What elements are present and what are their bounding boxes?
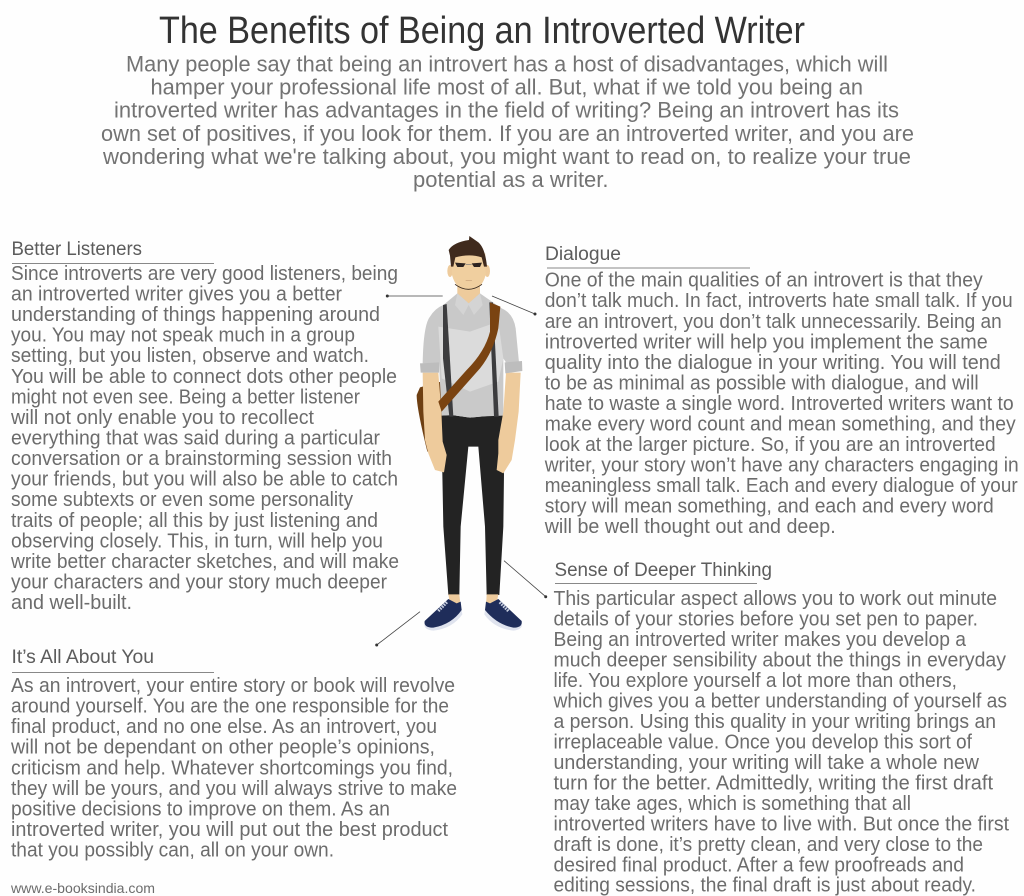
- body text: better listeners: Since introverts are very good listeners, being: [11, 263, 398, 285]
- body text: better listeners: observing closely. This, in turn, will help you: [11, 530, 383, 552]
- body text: sense of deeper thinking: desired final product. After a few proofreads and: [554, 854, 964, 876]
- body text: better listeners: your friends, but you will also be able to catch: [11, 469, 398, 491]
- hair: [449, 236, 487, 267]
- panel: sense of deeper thinking: [553, 560, 1009, 896]
- cross-body strap: [438, 302, 500, 412]
- body text: better listeners: might not even see. Being a better listener: [11, 386, 360, 408]
- body text: better listeners: You will be able to connect dots other people: [11, 366, 397, 388]
- body text: dialogue: are an introvert, you don’t talk unnecessarily. Being an: [545, 311, 1002, 333]
- heading: better listeners: Better Listeners: [12, 239, 142, 260]
- body text: dialogue: to be as minimal as possible with dialogue, and will: [545, 372, 979, 394]
- body text: better listeners: an introverted writer gives you a better: [11, 284, 342, 306]
- body text: sense of deeper thinking: a person. Using this quality in your writing brings an: [554, 711, 996, 733]
- intro text block: introverted writer has advantages in the field of writing? Being an introvert has its: [114, 98, 899, 122]
- glasses and eyes: [455, 263, 482, 267]
- body text: better listeners: you. You may not speak much in a group: [11, 325, 355, 347]
- intro text block: wondering what we're talking about, you might want to read on, to realize your true: [102, 144, 911, 169]
- body text: better listeners: and well-built.: [11, 592, 132, 614]
- heading: dialogue: Dialogue: [545, 244, 621, 265]
- body text: sense of deeper thinking: which gives you a better understanding of yourself as: [553, 690, 1007, 712]
- shirt: [423, 293, 519, 418]
- intro text block: own set of positives, if you look for them. If you are an introverted writer, and you are: [101, 121, 914, 146]
- body text: it's all about you: As an introvert, your entire story or book will revolve: [11, 675, 455, 697]
- intro text block: hamper your professional life most of all. But, what if we told you being an: [150, 74, 863, 100]
- body text: sense of deeper thinking: Being an introverted writer makes you develop a: [554, 629, 967, 651]
- panel: it's all about you: [10, 647, 457, 862]
- intro text block: potential as a writer.: [413, 167, 608, 192]
- body text: it's all about you: final product, and no one else. As an introvert, you: [11, 716, 437, 738]
- body text: sense of deeper thinking: turn for the better. Admittedly, writing the first draft: [554, 772, 993, 794]
- body text: better listeners: will not only enable you to recollect: [10, 407, 314, 429]
- body text: it's all about you: will not be dependant on other people’s opinions,: [10, 737, 435, 759]
- bag: [417, 382, 443, 452]
- title: The Benefits of Being an Introverted Writer: [159, 10, 805, 52]
- body text: dialogue: hate to waste a single word. Introverted writers want to: [545, 393, 1014, 415]
- intro text block: [101, 52, 914, 192]
- shoe soles: [424, 610, 522, 631]
- body text: better listeners: understanding of things happening around: [11, 304, 380, 326]
- body text: it's all about you: around yourself. You are the one responsible for the: [11, 696, 449, 718]
- body text: better listeners: everything that was said during a particular: [11, 428, 380, 450]
- arrow: connector to dialogue: [492, 296, 536, 316]
- body text: sense of deeper thinking: introverted writers have to live with. But once the first: [554, 814, 1009, 836]
- pants: [442, 414, 504, 595]
- body text: dialogue: quality into the dialogue in your writing. You will tend: [545, 352, 1001, 374]
- body text: better listeners: your characters and your story much deeper: [11, 572, 387, 594]
- face: [452, 253, 486, 291]
- panel: better listeners: [10, 239, 399, 614]
- body text: dialogue: make every word count and mean something, and they: [545, 414, 1016, 436]
- body text: sense of deeper thinking: irreplaceable value. Once you develop this sort of: [554, 732, 972, 754]
- body text: sense of deeper thinking: may take ages, which is something that all: [554, 793, 911, 815]
- body text: it's all about you: criticism and help. Whatever shortcomings you find,: [11, 757, 453, 779]
- ears: [447, 265, 490, 277]
- arrow: connector to sense of deeper thinking: [504, 561, 547, 598]
- body text: it's all about you: that you possibly can, all on your own.: [11, 840, 334, 862]
- body text: sense of deeper thinking: much deeper sensibility about the things in everyday: [554, 650, 1006, 672]
- shoe laces: [438, 602, 508, 611]
- body text: sense of deeper thinking: life. You explore yourself a lot more than others,: [554, 670, 957, 692]
- body text: better listeners: traits of people; all this by just listening and: [11, 510, 378, 532]
- body text: it's all about you: positive decisions to improve on them. As an: [11, 798, 390, 820]
- body text: sense of deeper thinking: details of your stories before you set pen to paper.: [554, 608, 978, 630]
- body text: sense of deeper thinking: [553, 588, 1009, 896]
- body text: dialogue: [544, 270, 1019, 538]
- mouth: [466, 280, 472, 282]
- body text: dialogue: One of the main qualities of an introvert is that they: [545, 270, 983, 292]
- rolled sleeve cuffs: [420, 361, 522, 373]
- body text: it's all about you: introverted writer, you will put out the best product: [11, 819, 448, 841]
- website credit: www.e-booksindia.com: [10, 880, 155, 896]
- body text: better listeners: conversation or a brainstorming session with: [11, 448, 392, 470]
- right shoe: [485, 599, 522, 628]
- left shoe: [425, 599, 462, 628]
- body text: dialogue: story will mean something, and each and every word: [545, 496, 994, 518]
- body text: sense of deeper thinking: draft is done, it’s pretty clean, and very close to the: [554, 834, 983, 856]
- body text: it's all about you: they will be yours, and you will always strive to make: [11, 778, 457, 800]
- body text: it's all about you: [10, 675, 457, 862]
- body text: better listeners: setting, but you listen, observe and watch.: [11, 345, 369, 367]
- right arm: [497, 373, 521, 473]
- jaw line: [455, 284, 482, 289]
- body text: dialogue: will be well thought out and deep.: [544, 516, 836, 538]
- body text: dialogue: writer, your story won’t have any characters engaging in: [544, 455, 1019, 477]
- body text: sense of deeper thinking: understanding, your writing will take a whole new: [554, 752, 980, 774]
- body text: dialogue: don’t talk much. In fact, introverts hate small talk. If you: [545, 290, 1013, 312]
- placket and collar: [455, 293, 483, 315]
- left arm: [423, 373, 447, 472]
- shirt highlights: [438, 322, 503, 392]
- body text: dialogue: introverted writer will help you implement the same: [545, 331, 988, 353]
- illustration: introverted writer character: [417, 236, 522, 631]
- suspenders: [443, 302, 499, 417]
- body text: better listeners: [10, 263, 399, 614]
- neck: [457, 282, 480, 305]
- body text: better listeners: write better character sketches, and will make: [10, 551, 399, 573]
- body text: better listeners: some subtexts or even some personality: [11, 489, 353, 511]
- panel: dialogue: [544, 244, 1019, 538]
- arrow: connector to it's all about you: [375, 612, 420, 646]
- ankles: [448, 594, 498, 607]
- heading: sense of deeper thinking: Sense of Deeper Thinking: [554, 560, 772, 581]
- arrow: connector to better listeners: [386, 294, 443, 298]
- body text: dialogue: look at the larger picture. So, if you are an introverted: [545, 434, 996, 456]
- intro text block: Many people say that being an introvert has a host of disadvantages, which will: [126, 52, 888, 76]
- body text: sense of deeper thinking: This particular aspect allows you to work out minute: [554, 588, 997, 610]
- heading: it's all about you: It’s All About You: [12, 647, 154, 668]
